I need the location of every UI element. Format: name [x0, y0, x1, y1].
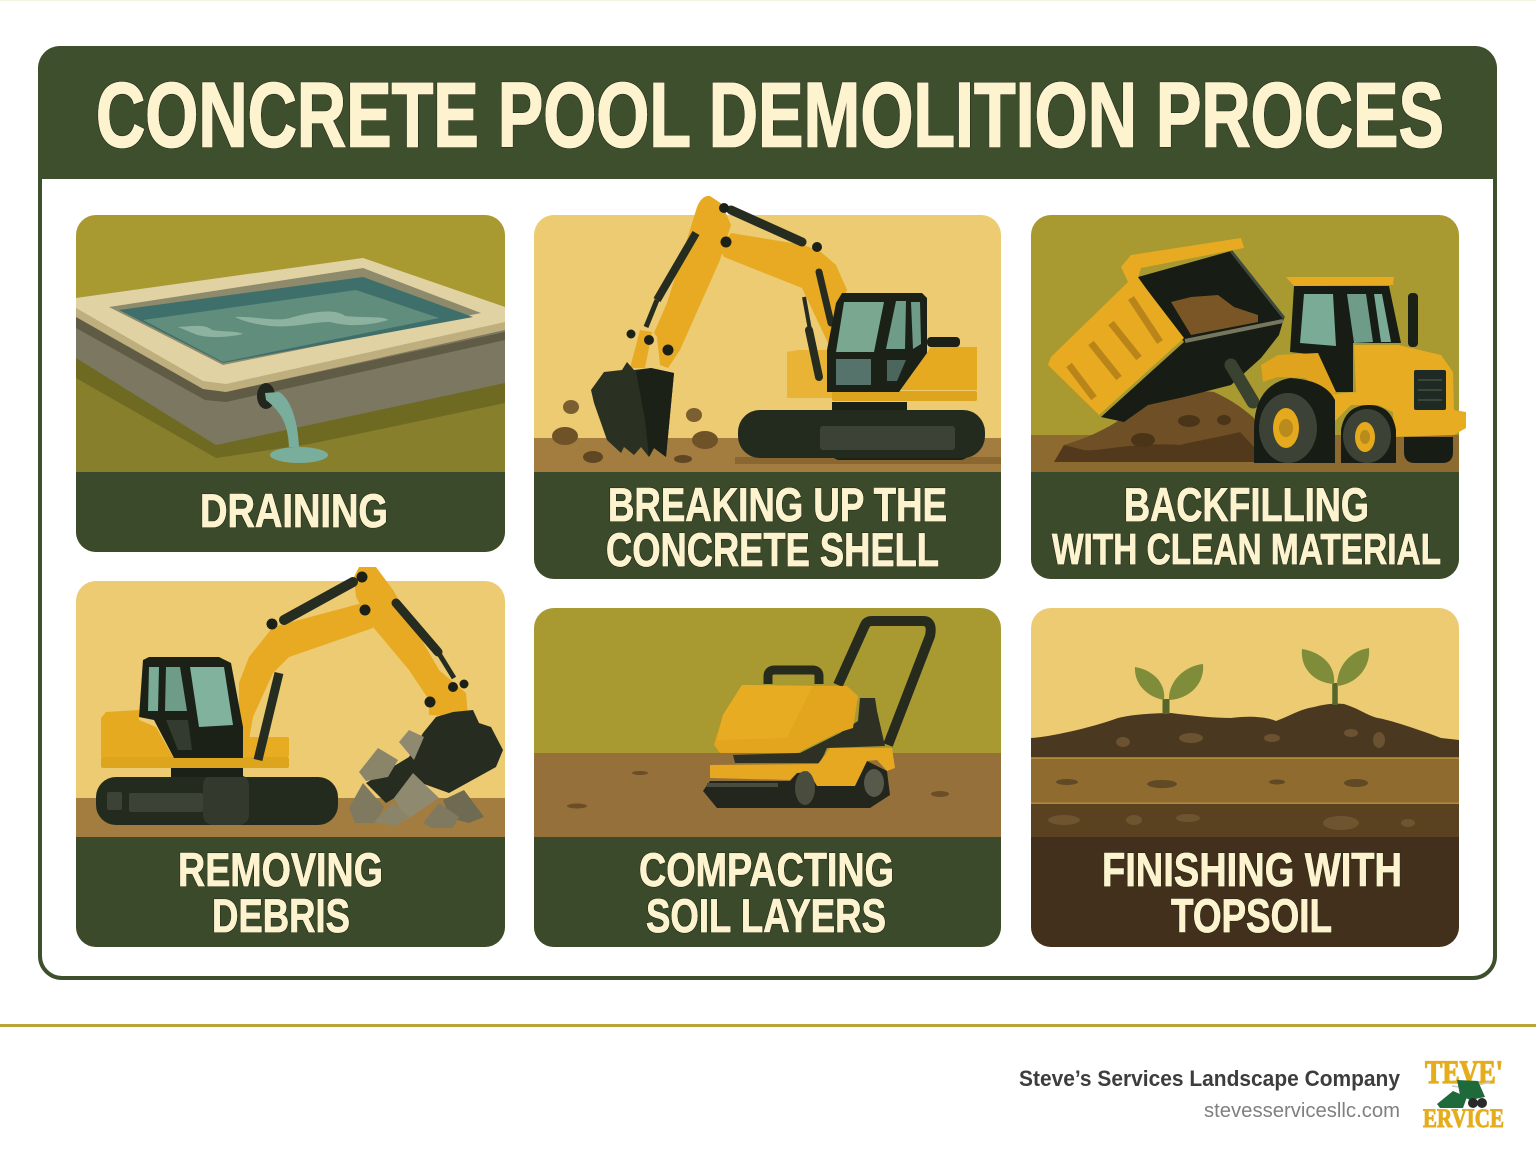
panel: removing debris	[76, 567, 505, 947]
bucket	[591, 362, 674, 457]
icon: dirt pile	[1054, 391, 1268, 462]
icon: rocks	[349, 730, 484, 828]
panel: draining	[76, 215, 505, 552]
icon: plate compactor	[703, 621, 931, 808]
icon: company logo	[1423, 1055, 1504, 1133]
boom	[239, 602, 373, 757]
label: DEBRIS	[212, 889, 350, 942]
footer rule	[0, 1024, 1536, 1027]
bucket	[366, 710, 503, 803]
icon: right seedling	[1302, 648, 1369, 705]
icon: left seedling	[1135, 664, 1203, 714]
main frame	[40, 48, 1495, 978]
label	[639, 843, 894, 942]
label	[1052, 478, 1441, 574]
panel: finishing with topsoil	[1031, 608, 1459, 947]
icon: topsoil mound	[1031, 704, 1459, 757]
footer: company name: Steve’s Services Landscape Company	[1019, 1066, 1401, 1091]
boom	[719, 233, 847, 345]
label: COMPACTING	[639, 843, 894, 896]
body	[1323, 345, 1466, 437]
arm	[354, 567, 468, 717]
label: DRAINING	[200, 484, 388, 537]
panel: breaking up the concrete shell	[534, 196, 1001, 579]
label	[178, 843, 383, 942]
icon: excavator	[591, 196, 985, 460]
icon: excavator	[96, 567, 503, 828]
icon: company logo: TEVE'	[1425, 1055, 1503, 1091]
cab	[139, 657, 243, 758]
icon: company logo: ERVICE	[1423, 1104, 1504, 1133]
label: FINISHING WITH	[1102, 843, 1402, 896]
panel: compacting soil layers	[534, 608, 1001, 947]
label: REMOVING	[178, 843, 383, 896]
label: CONCRETE SHELL	[606, 523, 939, 576]
icon: drain pipe and water	[257, 383, 275, 409]
label: BACKFILLING	[1124, 478, 1369, 531]
panel: backfilling with clean material	[1031, 215, 1466, 579]
label	[1102, 843, 1402, 942]
icon: pool rim	[76, 258, 505, 392]
icon: pool wall	[76, 315, 505, 445]
label: SOIL LAYERS	[646, 889, 886, 942]
label	[606, 478, 947, 576]
icon: pool water	[119, 277, 473, 363]
title banner	[38, 46, 1497, 179]
arm	[654, 196, 731, 368]
footer: website: stevesservicesllc.com	[1204, 1100, 1400, 1122]
cab	[827, 293, 927, 392]
label: BREAKING UP THE	[608, 478, 947, 531]
label: TOPSOIL	[1171, 889, 1332, 942]
icon: dump truck	[1048, 238, 1466, 463]
